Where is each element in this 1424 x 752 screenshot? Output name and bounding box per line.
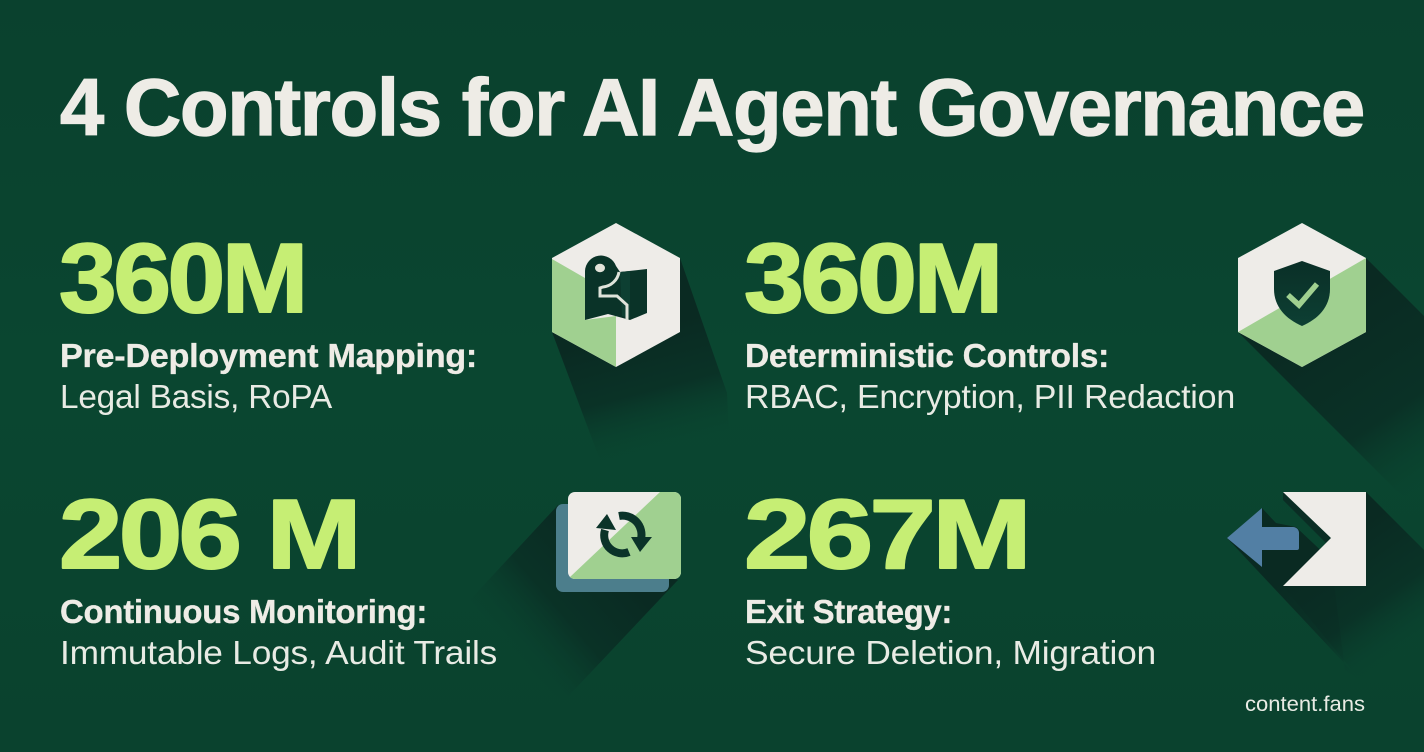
stat: 360M mapping: 360M	[59, 223, 305, 333]
panel: continuous monitoring	[59, 479, 681, 705]
label: exit strategy: Exit Strategy:	[745, 593, 952, 630]
label: deterministic controls: Deterministic Controls:	[745, 337, 1109, 374]
title: 4 Controls for AI Agent Governance	[60, 63, 1364, 153]
icon: shield hexagon	[1238, 223, 1424, 510]
text: secure deletion, migration: Secure Deletion, Migration	[745, 634, 1156, 671]
panel: pre-deployment mapping	[59, 223, 730, 460]
text: RBAC, encryption, PII redaction: RBAC, Encryption, PII Redaction	[745, 378, 1235, 415]
label: continuous monitoring: Continuous Monitoring:	[60, 593, 427, 630]
label: pre-deployment mapping: Pre-Deployment Mapping:	[60, 337, 477, 374]
icon: map and pin hexagon	[552, 223, 730, 460]
stat: 206 M: 206 M	[59, 479, 358, 589]
panel: deterministic controls	[744, 223, 1424, 510]
panel: exit strategy	[744, 479, 1424, 680]
text: legal basis, RoPA: Legal Basis, RoPA	[60, 378, 332, 415]
icon: exit arrow	[1227, 492, 1424, 680]
stat: 267M: 267M	[744, 479, 1028, 589]
footer: source: content.fans	[1245, 693, 1365, 716]
text: immutable logs, audit trails: Immutable Logs, Audit Trails	[60, 634, 497, 671]
icon: refresh cards	[470, 492, 681, 705]
stat: 360M controls: 360M	[744, 223, 1000, 333]
